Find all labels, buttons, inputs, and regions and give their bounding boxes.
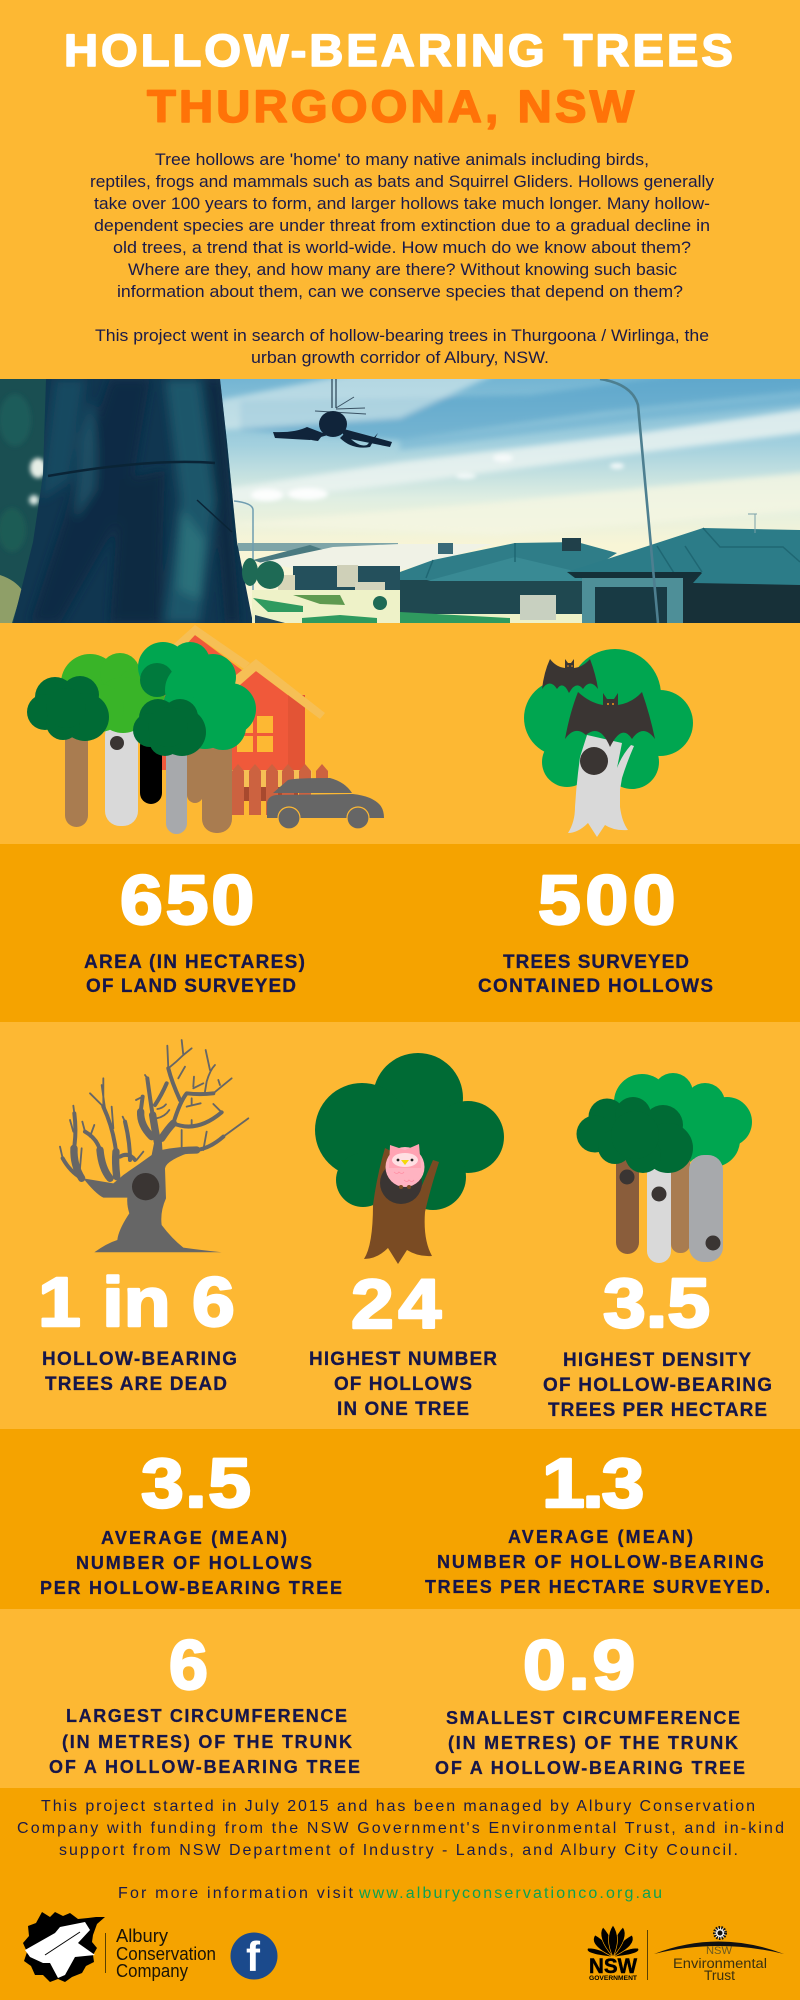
dark green canopies <box>27 676 206 756</box>
footer text: For more information visit <box>118 1885 354 1902</box>
stat: 650 hectares <box>84 860 305 997</box>
intro text: take over 100 years to form, and larger hollows take much longer. Many hollow- <box>94 194 710 213</box>
stat: 1.3 mean trees: NUMBER OF HOLLOW-BEARING <box>437 1552 764 1572</box>
stat: 3.5 density: OF HOLLOW-BEARING <box>543 1375 772 1396</box>
logo: NSW Government: GOVERNMENT <box>589 1975 637 1982</box>
stat: 500 trees: 500 <box>538 860 676 939</box>
intro text: reptiles, frogs and mammals such as bats and Squirrel Gliders. Hollows generally <box>90 172 715 191</box>
front canopy <box>576 1097 693 1173</box>
stat band: 3.5 and 1.3 <box>0 1429 800 1609</box>
footer text: support from NSW Department of Industry - Lands, and Albury City Council. <box>59 1842 738 1859</box>
stat: 1.3 mean trees <box>425 1443 770 1597</box>
stat: 24 <box>309 1264 497 1420</box>
middle house <box>400 578 590 614</box>
glider emblem <box>23 1912 105 1982</box>
house back <box>150 635 255 770</box>
icon: houses, trees and car <box>27 625 384 834</box>
stat: 650 hectares: AREA (IN HECTARES) <box>84 952 305 973</box>
light green canopy <box>61 653 165 733</box>
intro text: Where are they, and how many are there? Without knowing such basic <box>128 260 678 279</box>
stat: 3.5 density <box>543 1263 772 1421</box>
stat: 0.9 smallest circumference: SMALLEST CIRCUMFERENCE <box>446 1708 740 1728</box>
logo: NSW Government: NSW <box>589 1955 637 1978</box>
stat: 0.9 smallest circumference: 0.9 <box>523 1625 635 1704</box>
logo: Albury Conservation Company: Albury <box>116 1926 168 1946</box>
mid green canopy top <box>138 642 236 700</box>
intro text: This project went in search of hollow-bearing trees in Thurgoona / Wirlinga, the <box>95 326 709 345</box>
intro text: old trees, a trend that is world-wide. How much do we know about them? <box>113 238 691 257</box>
stat: 6 largest circumference: OF A HOLLOW-BEARING TREE <box>49 1757 360 1777</box>
icon: tree with bats <box>524 649 693 837</box>
fence <box>200 770 312 787</box>
stat: 500 trees: TREES SURVEYED <box>503 952 689 973</box>
bat small <box>542 659 598 693</box>
stat: 24: HIGHEST NUMBER <box>309 1349 497 1370</box>
canopy <box>315 1053 504 1210</box>
trunks <box>671 1150 690 1253</box>
logo: Albury Conservation Company: Company <box>116 1961 188 1981</box>
title line 1: HOLLOW-BEARING TREES <box>64 25 733 76</box>
stat: 3.5 mean hollows <box>40 1443 342 1598</box>
street lamp left <box>234 501 253 590</box>
stat band: 650 and 500 <box>0 844 800 1022</box>
hollow <box>380 1162 422 1204</box>
dark hollow in canopy <box>140 663 174 697</box>
stat: 6 largest circumference <box>49 1626 360 1777</box>
intro text <box>90 150 715 367</box>
stat: 500 trees <box>478 860 713 997</box>
title line 2: THURGOONA, NSW <box>147 81 635 132</box>
intro text: information about them, can we conserve species that depend on them? <box>117 282 683 301</box>
stat: 1 in 6: HOLLOW-BEARING <box>42 1349 237 1370</box>
stat: 650 hectares: OF LAND SURVEYED <box>86 976 296 997</box>
distant houses <box>254 545 322 562</box>
back canopy <box>614 1073 752 1168</box>
stat: 6 largest circumference: (IN METRES) OF THE TRUNK <box>62 1732 352 1752</box>
stat: 1 in 6 <box>38 1262 237 1395</box>
stat: 3.5 mean hollows: 3.5 <box>141 1443 251 1522</box>
canopy <box>524 649 693 789</box>
stat: 500 trees: CONTAINED HOLLOWS <box>478 976 713 997</box>
emblem <box>714 1928 726 1938</box>
icon: group of trees <box>576 1073 752 1263</box>
stat: 6 largest circumference: 6 <box>169 1626 208 1704</box>
trunk <box>364 1148 439 1264</box>
stat: 24: IN ONE TREE <box>337 1399 469 1420</box>
mid green canopy bottom <box>163 662 256 750</box>
intro text: dependent species are under threat from extinction due to a gradual decline in <box>94 216 710 235</box>
logo: NSW Government <box>587 1925 648 1982</box>
stat: 1 in 6: TREES ARE DEAD <box>45 1374 227 1395</box>
icon: dead tree <box>60 1040 248 1252</box>
stat: 3.5 density: HIGHEST DENSITY <box>563 1350 751 1371</box>
right house <box>683 573 800 623</box>
car <box>267 778 384 829</box>
stat: 24: OF HOLLOWS <box>334 1374 472 1395</box>
stat: 0.9 smallest circumference: OF A HOLLOW-BEARING TREE <box>435 1758 745 1778</box>
stat: 1.3 mean trees: AVERAGE (MEAN) <box>508 1527 693 1547</box>
logo: NSW Environmental Trust: Trust <box>704 1968 735 1983</box>
logo: NSW Environmental Trust <box>654 1928 784 1983</box>
trunk <box>0 379 260 623</box>
footer text: This project started in July 2015 and has been managed by Albury Conservation <box>41 1798 755 1815</box>
ground <box>252 590 582 623</box>
photo: giant tree with hanging climber above a new housing estate <box>0 372 800 623</box>
intro text: urban growth corridor of Albury, NSW. <box>251 348 549 367</box>
stat: 1.3 mean trees: 1.3 <box>542 1443 644 1522</box>
branches <box>60 1040 248 1178</box>
trunks <box>187 740 203 803</box>
hollow <box>580 747 608 775</box>
stat: 0.9 smallest circumference: (IN METRES) OF THE TRUNK <box>448 1733 738 1753</box>
stat: 6 largest circumference: LARGEST CIRCUMFERENCE <box>66 1706 347 1726</box>
stat: 3.5 mean hollows: NUMBER OF HOLLOWS <box>76 1553 312 1573</box>
footer text: www.alburyconservationco.org.au <box>358 1885 662 1902</box>
logo: NSW Environmental Trust: Environmental <box>673 1956 767 1971</box>
house front <box>225 671 305 770</box>
stat: 3.5 density: 3.5 <box>603 1263 710 1342</box>
logo: NSW Environmental Trust: NSW <box>706 1945 733 1957</box>
icon: facebook: f <box>246 1933 261 1980</box>
icon: tree with owl <box>315 1053 504 1264</box>
waratah <box>587 1925 639 1957</box>
icon: facebook <box>230 1932 278 1980</box>
lamp post <box>600 379 658 623</box>
trunk <box>83 1138 222 1252</box>
hollow <box>132 1173 159 1200</box>
stat: 650 hectares: 650 <box>120 860 254 939</box>
foliage left of trunk <box>0 379 46 623</box>
stat: 24: 24 <box>351 1264 441 1343</box>
stat: 3.5 density: TREES PER HECTARE <box>548 1400 767 1421</box>
stat: 1 in 6: 1 in 6 <box>38 1262 235 1341</box>
stat: 3.5 mean hollows: PER HOLLOW-BEARING TREE <box>40 1578 342 1598</box>
logo: Albury Conservation Company: Conservation <box>116 1944 216 1964</box>
intro text: Tree hollows are 'home' to many native animals including birds, <box>155 150 649 169</box>
logo: Albury Conservation Company <box>23 1912 216 1982</box>
hollows <box>620 1170 720 1250</box>
footer text <box>17 1798 784 1902</box>
hanging climber <box>273 379 392 448</box>
bat large <box>565 692 655 747</box>
trunk <box>568 735 634 837</box>
title <box>64 25 733 132</box>
owl <box>386 1144 424 1189</box>
stat: 3.5 mean hollows: AVERAGE (MEAN) <box>101 1528 287 1548</box>
footer text: Company with funding from the NSW Government's Environmental Trust, and in-kind <box>17 1820 784 1837</box>
stat: 1.3 mean trees: TREES PER HECTARE SURVEYED. <box>425 1577 770 1597</box>
footer band <box>0 1788 800 2000</box>
stat: 0.9 smallest circumference <box>435 1625 745 1778</box>
